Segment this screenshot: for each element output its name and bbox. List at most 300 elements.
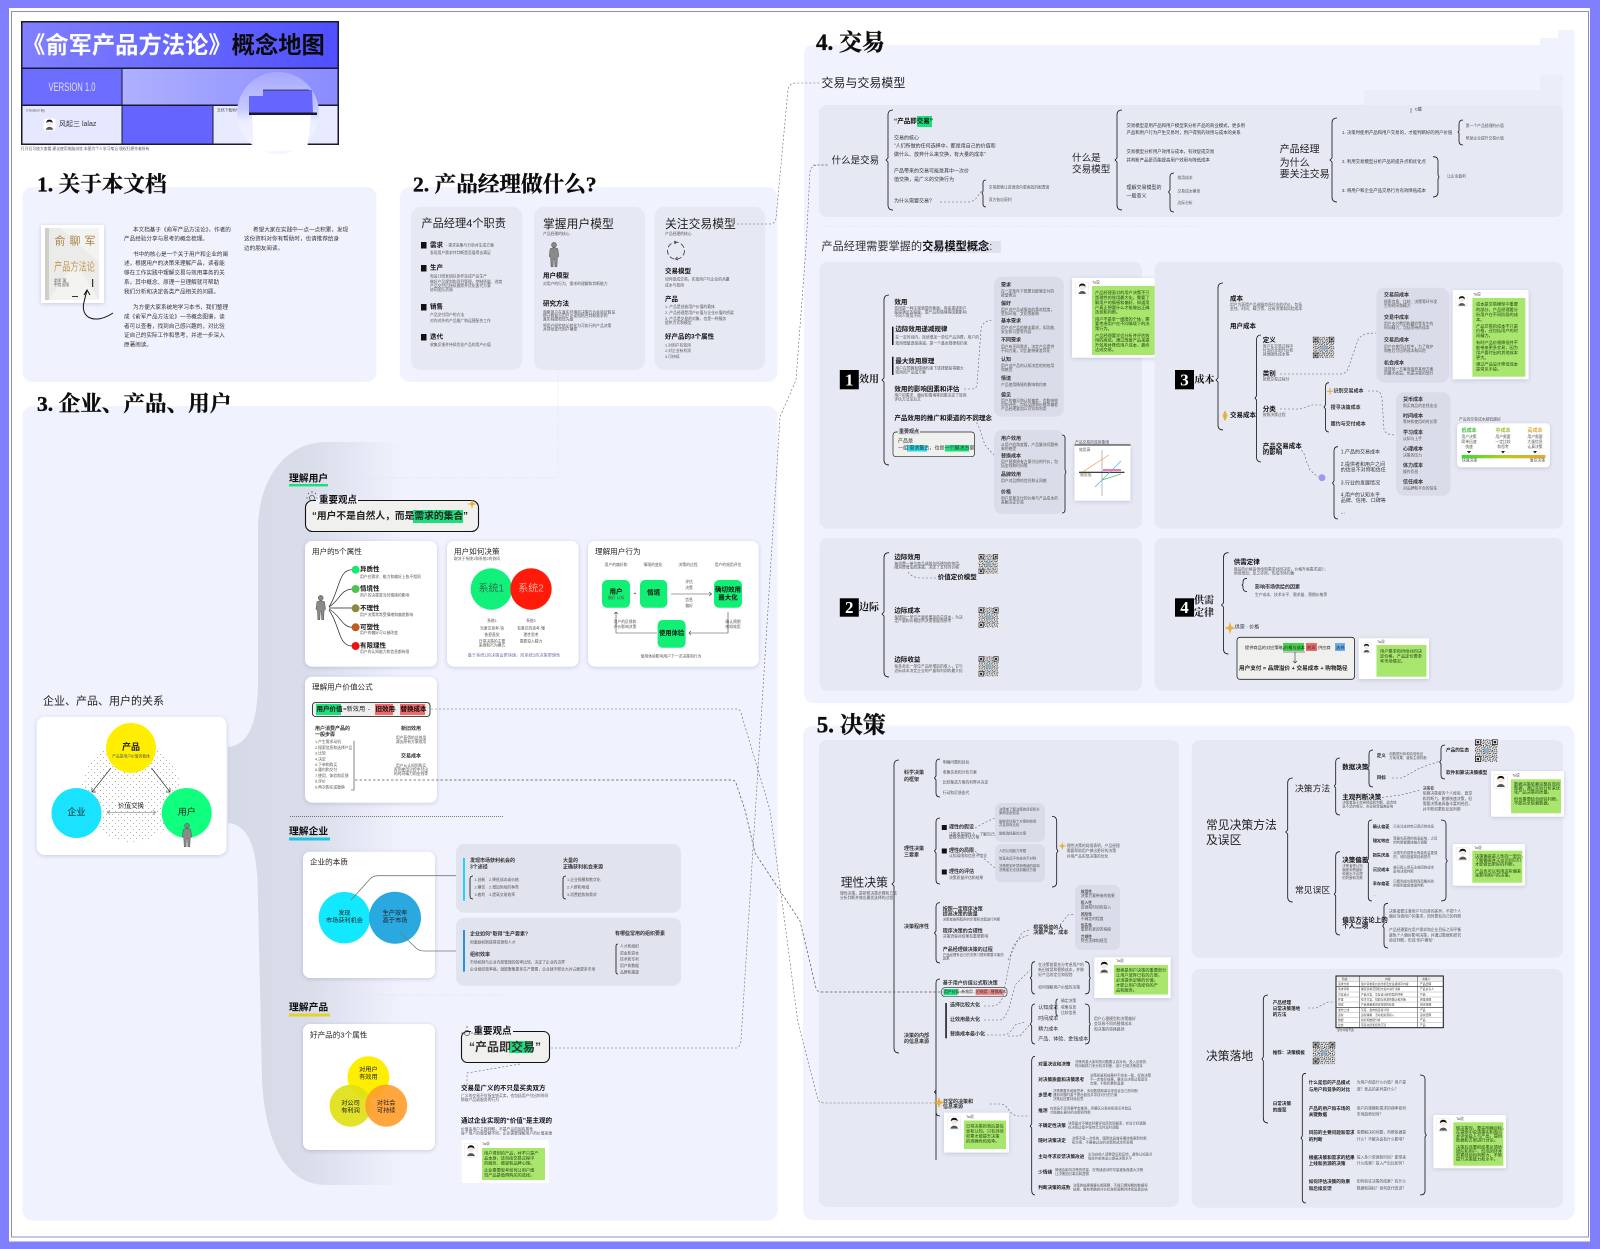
grey panel: search cost: 时间成本	[1403, 412, 1423, 419]
section label: relation: 企业、产品、用户的关系	[43, 694, 164, 708]
grey panel: cost types: 交易中成本	[1384, 314, 1409, 321]
box: utility maximum: 确切效用	[715, 584, 741, 594]
card: value formula: 8.评价	[315, 778, 326, 783]
panel: 1 utility: 效用	[859, 372, 879, 386]
chat note: Ta说	[966, 1114, 974, 1119]
card: value formula: 6.履约和交付	[315, 767, 337, 772]
card: value formula: 再到使用过程中付出	[394, 767, 428, 772]
panel: 3 cost: 成本	[1230, 294, 1244, 302]
list: proposal questions: 投入多少资源和时间？能带来	[1357, 1155, 1406, 1160]
inner: rational decision: 基于用户价值公式取决策	[943, 980, 998, 987]
formula: 替换成本	[400, 704, 427, 713]
list: decision habits: 不确定性决策	[1038, 1122, 1066, 1129]
box: user: 偏好·认知	[608, 595, 624, 600]
formula small: 用户价值=新效用 - 旧效用 - 替换成本	[944, 989, 1006, 994]
grey panel: utility types: 用户有不同需求，决定产品提供	[1001, 344, 1054, 349]
inner: what is transaction: 交易模型	[1072, 164, 1111, 176]
inner: rational decision: 的框架	[904, 776, 919, 783]
grey panel: factors: 重要和紧迫的程度	[1081, 927, 1111, 932]
table: decision template: 测试经理	[1420, 1002, 1431, 1006]
card: scale: 低成本	[1461, 427, 1477, 434]
inner: decision implement: 决策落地	[1206, 1049, 1253, 1063]
chat note: 达成交易。	[1095, 346, 1116, 353]
card: scale: 简单迅速	[1461, 439, 1477, 444]
chat note	[1072, 278, 1160, 358]
intro text left column: 书中的核心是一个关于用户和企业的阐	[133, 250, 229, 258]
card: 5 attributes: 可塑性	[360, 622, 380, 631]
inner: what is transaction: C端	[1415, 106, 1422, 111]
chart: utility axes: 效用高	[1079, 447, 1091, 452]
inner: what is transaction: 让企业盈利	[1447, 174, 1466, 179]
intro text right column: 希望大家在实践中一点一点积累，发现	[253, 226, 349, 234]
table: decision template: 灰度、发布和运营计划	[1361, 1008, 1389, 1012]
card: scale: 用户决策	[1461, 434, 1477, 439]
inner: decision implement: 的方法	[1273, 1011, 1287, 1018]
formula: 用户价值	[316, 704, 343, 713]
table: decision template: 用户需求和价值分析及优先级排序内容	[1361, 982, 1409, 986]
inner: rational decision: 理性的局限	[949, 847, 974, 854]
circle: user: 用户	[178, 806, 196, 817]
circle: product: 产品是用户价值的载体	[112, 754, 150, 759]
box: user	[602, 580, 630, 608]
list: decision habits: 判断决策的成败	[1038, 1184, 1071, 1191]
inner: rational decision: 用户心理模型和决策偏好	[1094, 1016, 1136, 1021]
inner: what is transaction: 要关注交易	[1280, 168, 1330, 180]
chat note: 必须提供足够的价值，	[1116, 976, 1158, 984]
list: decision habits: 在信息不足时要学会推测，但要区分事实和观点并验证	[1050, 1105, 1132, 1110]
panel: 3 cost: 按照交易过程分	[1263, 376, 1290, 381]
inner: what is transaction: 并判断产品是否能提高用户效用与降低成本	[1126, 156, 1211, 164]
card: 5 attributes: 有限理性	[360, 640, 386, 650]
card: user model: 用户模型	[543, 270, 570, 280]
version cell: VERSION 1.0	[48, 80, 96, 94]
panel: production factors: 企业如何“取得”生产要素?	[470, 930, 528, 937]
diamond: transaction cost	[1222, 410, 1256, 421]
chat note: 决策偏差是人性的一部分，	[1475, 852, 1525, 860]
callout: key view: 一组 需求集合，也是一个解决方案	[898, 444, 974, 451]
card: how user decides: 无意识思考·快	[480, 625, 504, 630]
card: four duties: - 需求采集与分析并生成方案	[446, 242, 494, 247]
inner: rational decision: 程序决策的合理性	[943, 927, 983, 934]
card: user model	[534, 207, 645, 370]
inner: what is transaction: 为什么	[1280, 157, 1310, 169]
chat note: 决策后还要把结果反馈给	[1456, 1144, 1502, 1150]
inner: common methods: 目标	[1377, 774, 1386, 781]
inner: rational decision: 选择比较大化	[950, 1002, 980, 1009]
grey panel: utility promotion: 用户效用	[1001, 435, 1021, 442]
note: value subjective	[461, 1116, 552, 1135]
grey panel: factors: 投入性	[1081, 900, 1092, 905]
card: enterprise nature: 发现	[338, 909, 351, 917]
card: scale: 快速决策	[1462, 458, 1477, 463]
chat note: 成本是交易模型中重要	[1476, 300, 1518, 308]
list: proposal questions: 上线和资源的决策	[1309, 1160, 1346, 1167]
card: four duties: 需求	[430, 240, 444, 249]
card: four duties: 收集反馈并持续优化产品的用户价值	[430, 342, 491, 347]
panel: 3 cost: ...	[1341, 510, 1345, 516]
chat note: Ta说	[1116, 958, 1124, 963]
intro text right column: 边的朋友阅读。	[244, 244, 283, 252]
callout: product is transaction: 重要观点	[474, 1025, 512, 1037]
list: proposal questions: 如何评估决策的效果	[1309, 1178, 1350, 1185]
chat note: Ta说	[1512, 772, 1520, 778]
card: value formula: 3.比较	[315, 751, 326, 756]
list: proposal questions: 需要解决的问题，判断依据是	[1357, 1129, 1406, 1134]
list: decision habits: 情绪会影响决策的质量，在情绪波动时尽量避免做重大决策	[1055, 1167, 1144, 1172]
card: enterprise nature: 高于市场	[383, 916, 407, 924]
chat note: 并评估投入与产出，提供	[1456, 1132, 1502, 1140]
grey panel: cost types	[1376, 288, 1449, 383]
card: enterprise nature: 企业的本质	[310, 856, 348, 866]
note: transaction broad: 交易是广义的不只是买卖双方	[461, 1083, 546, 1092]
panel: 3 cost: 2.提供者和用户之间	[1341, 461, 1385, 468]
panel: 3 cost: 按照决策过程	[1263, 412, 1286, 417]
inner: rational decision: 决策程序性	[904, 923, 929, 930]
list: decision habits: 对决策质量和决策思考	[1038, 1076, 1085, 1083]
inner: rational decision: 理性决策	[841, 875, 888, 889]
card: transaction model: 2. 产品经理是用户价值与企业价值的桥梁	[665, 310, 734, 315]
heading 2: 2. 产品经理做什么?	[413, 172, 597, 196]
inner: common methods: 决策者基于自身经验和判断，适合信	[1342, 800, 1397, 805]
card: user behaviour: 感知效用	[725, 624, 741, 629]
list: proposal questions: 和后续反馈	[1309, 1185, 1332, 1192]
panel: 2 marginal: 边际收益	[894, 654, 921, 664]
panel: production factors: 组织效率	[470, 951, 490, 958]
chat note: 策行为。	[1095, 325, 1112, 332]
list: decision habits	[1038, 1059, 1153, 1191]
inner: decision implement: 的提案	[1273, 1106, 1287, 1114]
grey panel: utility types: 不同方案，对比能带来差异化	[1001, 348, 1051, 353]
card: 5 attributes: 用户的5个属性	[312, 546, 362, 556]
formula small	[942, 988, 1007, 996]
card: user model: 产品经理的核心	[543, 231, 570, 236]
inner: what is transaction: 交易模型是用产品和用户模型来分析产品的商业模式，更多用	[1126, 122, 1245, 129]
card: transaction model	[655, 207, 765, 370]
grey panel: utility types: 产品使用情境的影响和约束	[1001, 382, 1047, 387]
panel: 3 cost: 金钱、时间、精力等，还有决策和风险成本	[1230, 306, 1302, 311]
grey panel: cost types: 用户支付费用和履约等发生的	[1384, 321, 1434, 326]
card: 5 attributes	[305, 541, 437, 667]
panel: 2 marginal	[819, 538, 1142, 691]
card: scale: 中成本	[1495, 427, 1511, 434]
panel: 2 marginal: 每消费一单位商品或服务所增加的效用，	[894, 561, 963, 566]
circle: enterprise: 企业	[67, 806, 86, 817]
chat note: 用的高低，通过改善产品来提	[1095, 336, 1150, 344]
card: scale: 产品的交易成本越低越好	[1459, 416, 1501, 421]
arrow: user steps to decision	[355, 780, 943, 992]
panel: 4 supply demand: 生产成本、技术水平、需求量、预期价格等	[1255, 592, 1327, 597]
arrow: transaction model link	[737, 83, 820, 224]
chat note	[944, 1113, 1009, 1153]
card: enterprise nature: 市场获利机会	[326, 916, 363, 924]
inner: rational decision: 理性的假设	[949, 824, 974, 831]
list: decision habits: 和方案，不要被过去的决策和成本所束缚	[1072, 1140, 1134, 1145]
panel: 1 utility: 效用	[894, 297, 907, 306]
formula: -	[394, 706, 396, 713]
card: how user decides: 系统1	[479, 582, 505, 594]
card: good product: 好产品的3个属性	[310, 1030, 368, 1040]
chat note: 息和认知，只有持续	[966, 1128, 1004, 1134]
icon: book cover: 中信出版	[54, 282, 69, 287]
subtitle: concepts: 产品经理需要掌握的交易模型概念:	[821, 239, 992, 253]
card: user behaviour: 信息	[685, 597, 693, 602]
callout: user is not natural person: “用户不是自然人，而是需求的集合”	[312, 509, 468, 522]
list: decision habits: 多思考	[1038, 1092, 1052, 1098]
card: good product: 对社会	[377, 1099, 395, 1107]
inner: common methods: 只看到成功案例而忽略失败	[1393, 879, 1435, 884]
table: decision template	[1336, 976, 1443, 1032]
chart: utility axes	[1074, 440, 1130, 501]
card: four duties: 和设计研发团队协作完成产品生产	[430, 274, 487, 279]
panel: 4 supply demand: 4	[1180, 598, 1189, 617]
inner: common methods: 和判断力，能够快速决策，但	[1423, 796, 1472, 801]
panel: 4 supply demand: 供需 · 价格	[1235, 624, 1259, 631]
chat note: 定价格，产品定价要参	[1380, 652, 1423, 660]
inner: rational decision: 科学决策	[904, 769, 924, 776]
grey panel: utility types: 用的评估，包括品牌和价格等偏差	[1001, 402, 1058, 407]
circle: product: 产品	[122, 741, 140, 752]
inner: common methods: ...	[1373, 893, 1376, 897]
inner: decision implement: 日常决策	[1273, 1100, 1291, 1107]
inner: rational decision: 如何理解用户价值的决策	[1038, 985, 1080, 990]
panel: production factors: 用户和数据	[620, 963, 639, 968]
chart: utility axes: 效用低	[1080, 472, 1092, 477]
chat note: 来影响用户的决策。	[1475, 872, 1513, 878]
box: context	[640, 580, 667, 608]
card: transaction model: 3.可持续	[665, 354, 680, 359]
card: how user decides: 来源和行为模式	[479, 643, 505, 648]
list: proposal questions: 什么结果？投入产出比如何？	[1357, 1161, 1406, 1166]
inner: what is transaction: 交易成本模型	[1178, 189, 1200, 194]
chat note: 数据，通过实验分析来优	[1514, 784, 1560, 792]
inner: common methods: 决策者要注意用户与自身的差异，不把个人	[1389, 909, 1461, 914]
inner: common methods: 决策者受认知	[1342, 863, 1363, 868]
chat note: 要考虑用户在不同情境下的决	[1095, 320, 1150, 327]
share cell	[214, 106, 338, 144]
panel: market opportunity: 发现市场获利机会的	[470, 857, 515, 864]
inner: common methods: 损失厌恶	[1373, 852, 1390, 858]
list: proposal questions: 如何验证决策的结果？有什么	[1357, 1179, 1406, 1184]
diamond: daily habit	[934, 1097, 973, 1110]
panel: 4 supply demand: 商品的价格由供给和需求共同决定，价格升高需求减少、	[1234, 566, 1329, 571]
card: transaction model: 关注交易模型	[665, 217, 736, 231]
icon: person at user	[182, 823, 192, 847]
card: four duties	[411, 207, 522, 370]
card: user behaviour: 决策的过程	[679, 562, 698, 567]
inner: what is transaction: 第一个产品经理的价值	[1466, 123, 1504, 128]
panel: production factors: 品牌和渠道	[620, 969, 639, 974]
box: experience	[658, 620, 686, 648]
icon: book cover: 俞军 著	[54, 278, 67, 283]
panel: section 5 decision	[803, 712, 1574, 1220]
inner: rational decision: 理性的评估	[949, 868, 974, 875]
icon: person	[549, 242, 559, 267]
inner: rational decision: 决策流程对结果有重要影响	[943, 933, 988, 938]
author cell: 风起三 lalaz	[59, 120, 97, 128]
formula box	[1237, 637, 1355, 679]
list: decision habits: 决策的结果需要长期观察，不能只看短期的数据和	[1073, 1182, 1148, 1187]
card: enterprise nature	[303, 852, 459, 978]
diamond: daily habit: 日常的决策和	[943, 1098, 973, 1105]
panel: 3 cost: 用户在交易过程中	[1263, 344, 1293, 349]
card: 5 attributes: 不理性	[360, 603, 380, 612]
grey panel: utility promotion: 括金钱和时间等	[1001, 463, 1028, 468]
panel: 2 marginal: 边际效用	[894, 552, 920, 561]
card: four duties: 发现用户需求并判断是否值得去满足	[430, 250, 491, 255]
chat note: 才能让用户选择你的产	[1116, 982, 1158, 988]
inner: common methods: 验证判断，形成“用户模型”	[1389, 938, 1434, 943]
card: transaction model: 提供方式和模型	[665, 320, 692, 325]
box: user: 用户	[610, 586, 622, 596]
card: value formula: 5.下单和购买	[315, 762, 337, 767]
panel: 2 marginal: 定产量和价格提供决策依据和参考	[894, 618, 952, 623]
chat note	[1453, 290, 1529, 379]
table: decision template: 发布上线	[1338, 1008, 1349, 1012]
panel: 1 utility: 不同人效用不同	[894, 313, 921, 318]
title banner	[22, 22, 338, 68]
list: proposal questions: 关键数据	[1309, 1111, 1327, 1118]
grey panel: utility promotion: 价格	[1001, 489, 1011, 496]
chat note: 考市场情况。	[1380, 658, 1405, 664]
chart: utility axes: 产品交易的效用象限	[1075, 440, 1109, 445]
inner: rational decision: 能够全面评估方案	[949, 835, 980, 840]
table: decision template: 产品方案、交互设计和原型的评审	[1361, 992, 1403, 996]
panel: production factors: 用激励机制获得资源和人才	[470, 939, 516, 944]
chat note	[1453, 844, 1525, 886]
inner: rational decision: 决策者是理性人，了解自己的偏好	[949, 831, 1006, 836]
inner: rational decision: 比较备选方案的利弊并决定	[943, 780, 988, 785]
list: decision habits: 决策需要多维度思考，多用数据和事实来验证自己的判断	[1053, 1088, 1138, 1093]
inner: rational decision: 比较信息	[1061, 1010, 1076, 1015]
grey panel: search cost: 学习成本	[1403, 429, 1423, 436]
grey panel: limits	[995, 844, 1045, 882]
inner: common methods: 的判断和决策	[1342, 875, 1363, 880]
list: proposal questions: 产品的用户和市场的	[1309, 1105, 1350, 1112]
list: decision habits: 不一定有好结果，要关注决策过程是否	[1090, 1076, 1148, 1082]
inner: rational decision: 决策者按照程序的步骤和流程进行判断	[943, 916, 1001, 922]
panel: market opportunity: 2.人群和地域	[567, 885, 589, 890]
inner: rational decision: 根据情境的人	[1033, 924, 1063, 931]
formula	[312, 702, 430, 716]
intro text right column	[244, 226, 349, 252]
inner: rational decision: 的信息来源	[904, 1038, 929, 1045]
list: decision habits: 时间和精力来分析并判断，减少日常决策成本	[1075, 1063, 1143, 1068]
grey bracket band	[228, 442, 403, 1185]
chat note: 解用户的情感和偏好，知道用	[1095, 299, 1149, 306]
panel: production factors	[456, 918, 681, 986]
table: decision template: 测试	[1338, 1002, 1344, 1006]
inner: common methods: 避免个人偏好影响决策，并通过数据和研究	[1389, 933, 1461, 938]
circle: product	[106, 723, 156, 773]
version cell	[22, 69, 122, 104]
chat note: 通过产品设计降低成本	[1476, 360, 1519, 368]
grey panel: search cost: 货币成本	[1403, 396, 1423, 403]
inner: what is transaction: “产品即交易”	[894, 116, 933, 125]
panel: section 1 about	[22, 172, 376, 382]
inner: rational decision: 理性决策	[904, 845, 924, 852]
inner: rational decision: 会导致不同的替换成本	[1094, 1021, 1132, 1026]
panel: section 4 transaction	[804, 30, 1574, 703]
note: value subjective: 价值由用户主观判断，不是产品的固有属性	[461, 1126, 533, 1131]
grey panel: cost types: 交易前成本	[1384, 292, 1409, 299]
card: scale: 大量信息	[1527, 439, 1543, 444]
inner: common methods: 产品的生态	[1446, 746, 1469, 754]
inner: common methods: 只关注支持自己观点的信息	[1393, 824, 1435, 829]
inner: common methods: 息不足的情况，也容易受偏差影响	[1342, 804, 1394, 809]
panel: 1 utility: 用户的需求、偏好和情境等因素决定了效用	[894, 393, 967, 398]
grey panel: search cost: 购买商品的金钱支出	[1403, 403, 1437, 408]
note: value subjective: 通过企业实现的“价值”是主观的	[461, 1116, 552, 1124]
card: transaction model: 2.对企业有利润	[665, 348, 691, 353]
panel: 4 supply demand: 供需	[1194, 594, 1214, 606]
grey panel: cost types: 的最大收益，也是决策的部分	[1384, 370, 1434, 376]
list: proposal questions: 为用户创造什么价值？用户是	[1357, 1080, 1406, 1085]
inner: what is transaction: 为什么需要交易?	[894, 198, 932, 205]
inner: rational decision: 理性决策的局限表明，产品经理	[1067, 843, 1120, 848]
table: decision template: 复盘	[1338, 1023, 1344, 1027]
diamond: transaction cost: 交易成本	[1230, 410, 1256, 419]
inner: rational decision: 因素	[943, 956, 950, 960]
card: user behaviour: 用户的偏好和	[605, 562, 628, 567]
inner: rational decision: 提高决策的质量	[943, 910, 978, 917]
list: decision habits: 让决策回归事实和逻辑	[1055, 1171, 1090, 1176]
grey panel: limits: 信息永远不完全也不对称	[999, 856, 1037, 860]
card: value formula: 9.再次购买或替换	[315, 784, 345, 789]
diamond: daily habit: 信息来源	[943, 1103, 963, 1110]
panel: 4 supply demand: 影响市场供给的因素	[1255, 583, 1300, 590]
inner: rational decision: 认知成本	[1038, 1004, 1058, 1011]
formula: =新效用	[343, 705, 365, 713]
panel: 3 cost: 用户成本	[1230, 321, 1256, 330]
formula: -	[368, 706, 370, 713]
grey panel: utility types: 需求	[1001, 282, 1011, 289]
inner: what is transaction: 产品带来的交易可能是其中一次价	[894, 168, 969, 175]
panel: 2 marginal: 每多卖出一单位产品所增加的收入，它与	[894, 664, 963, 669]
author cell: Created By	[26, 108, 45, 112]
chat note: 能带来更多交易，因为	[1476, 344, 1518, 351]
card: scale: 和思考	[1497, 444, 1509, 449]
panel: 3 cost: 用户为获得产品或服务所付出的代价，包括	[1230, 302, 1302, 307]
inner: rational decision	[819, 740, 1179, 1207]
inner: common methods: 方案效果，避免主观判断	[1389, 755, 1427, 760]
inner: common methods: 软件和算法决策模型	[1446, 769, 1488, 776]
grey panel: utility types: 受到环境、文化等影响	[1001, 311, 1039, 316]
formula: 旧效用	[376, 704, 395, 713]
list: decision habits: 遇到问题时善于提出假设并寻找可行的方案	[1053, 1092, 1118, 1097]
inner: what is transaction: 边际分析	[1178, 200, 1193, 205]
chat note: 产品交易的成本不只是	[1476, 322, 1519, 330]
icon: book cover: 军	[84, 235, 96, 248]
panel: market opportunity: 3.消费趋势和需求	[567, 892, 597, 897]
chat note: 日常决策的背后是信	[966, 1122, 1004, 1130]
icon: QR	[1313, 337, 1334, 358]
card: value formula: 用户获得的总效用	[396, 735, 426, 740]
grey panel: utility types: 在一定条件下想要且能够支付的	[1001, 288, 1054, 294]
inner: common methods: 偏好当做用户的需求，同时要有自己的判断	[1389, 914, 1461, 919]
list: proposal questions: 数据和指标？如何迭代改进？	[1357, 1185, 1406, 1190]
intro text left column: 原著阅读。	[124, 341, 152, 349]
card: transaction model: 产品经理的核心	[665, 231, 692, 236]
intro text left column	[124, 226, 231, 349]
card: user model: 将用户研究结论转化为可执行的产品决策	[543, 323, 612, 328]
grey panel: utility types: 和感受	[1001, 367, 1013, 372]
list: decision habits: 才能做出更好的决策和判断	[1050, 1109, 1091, 1114]
grey panel: factors: 资源和时间的投入	[1081, 904, 1111, 909]
grey panel: utility types: 用户的偏见和认知偏差，会影响效	[1001, 398, 1058, 403]
arrow: formula to rational decision	[431, 709, 936, 1103]
grey panel: cost types: 时间精力，包括等待的成本	[1384, 325, 1430, 330]
panel: 3 cost: 识别交易成本	[1334, 387, 1364, 394]
